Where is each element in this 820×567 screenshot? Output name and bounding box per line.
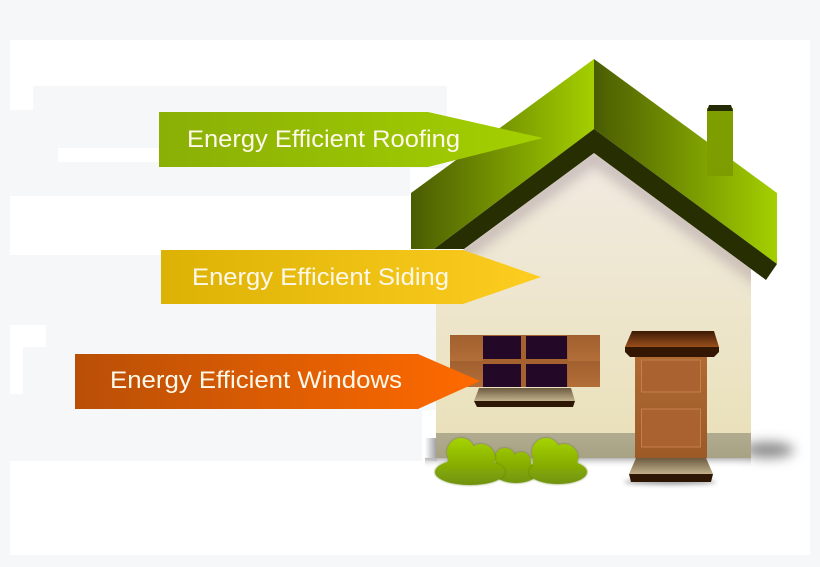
door <box>625 331 719 482</box>
background patches <box>0 86 447 461</box>
left shutter <box>450 335 483 387</box>
right shutter <box>568 335 600 387</box>
right bush <box>529 438 587 484</box>
wall <box>436 153 751 433</box>
roof right face <box>594 59 777 264</box>
arrow: roofing: Energy Efficient Roofing <box>187 126 460 153</box>
window <box>450 335 600 407</box>
arrow: windows: Energy Efficient Windows <box>110 367 402 394</box>
roof underside <box>434 129 777 280</box>
middle bush <box>494 448 538 483</box>
roof left face <box>411 59 594 249</box>
frame <box>483 335 568 387</box>
arrow: siding: Energy Efficient Siding <box>192 264 449 291</box>
chimney <box>707 105 733 176</box>
house <box>400 59 790 458</box>
door panels <box>642 360 700 447</box>
wall shadow under roof <box>463 153 751 287</box>
plinth <box>436 433 751 458</box>
sill <box>474 388 575 407</box>
arrow: roofing <box>159 112 543 167</box>
arrow: windows <box>75 354 480 409</box>
left bush <box>435 438 505 485</box>
panes <box>483 336 567 387</box>
door slab <box>635 357 707 458</box>
canopy <box>625 331 719 357</box>
arrow: siding <box>161 250 541 304</box>
ground shadows <box>425 438 794 484</box>
step <box>629 458 713 482</box>
bushes <box>435 438 587 485</box>
